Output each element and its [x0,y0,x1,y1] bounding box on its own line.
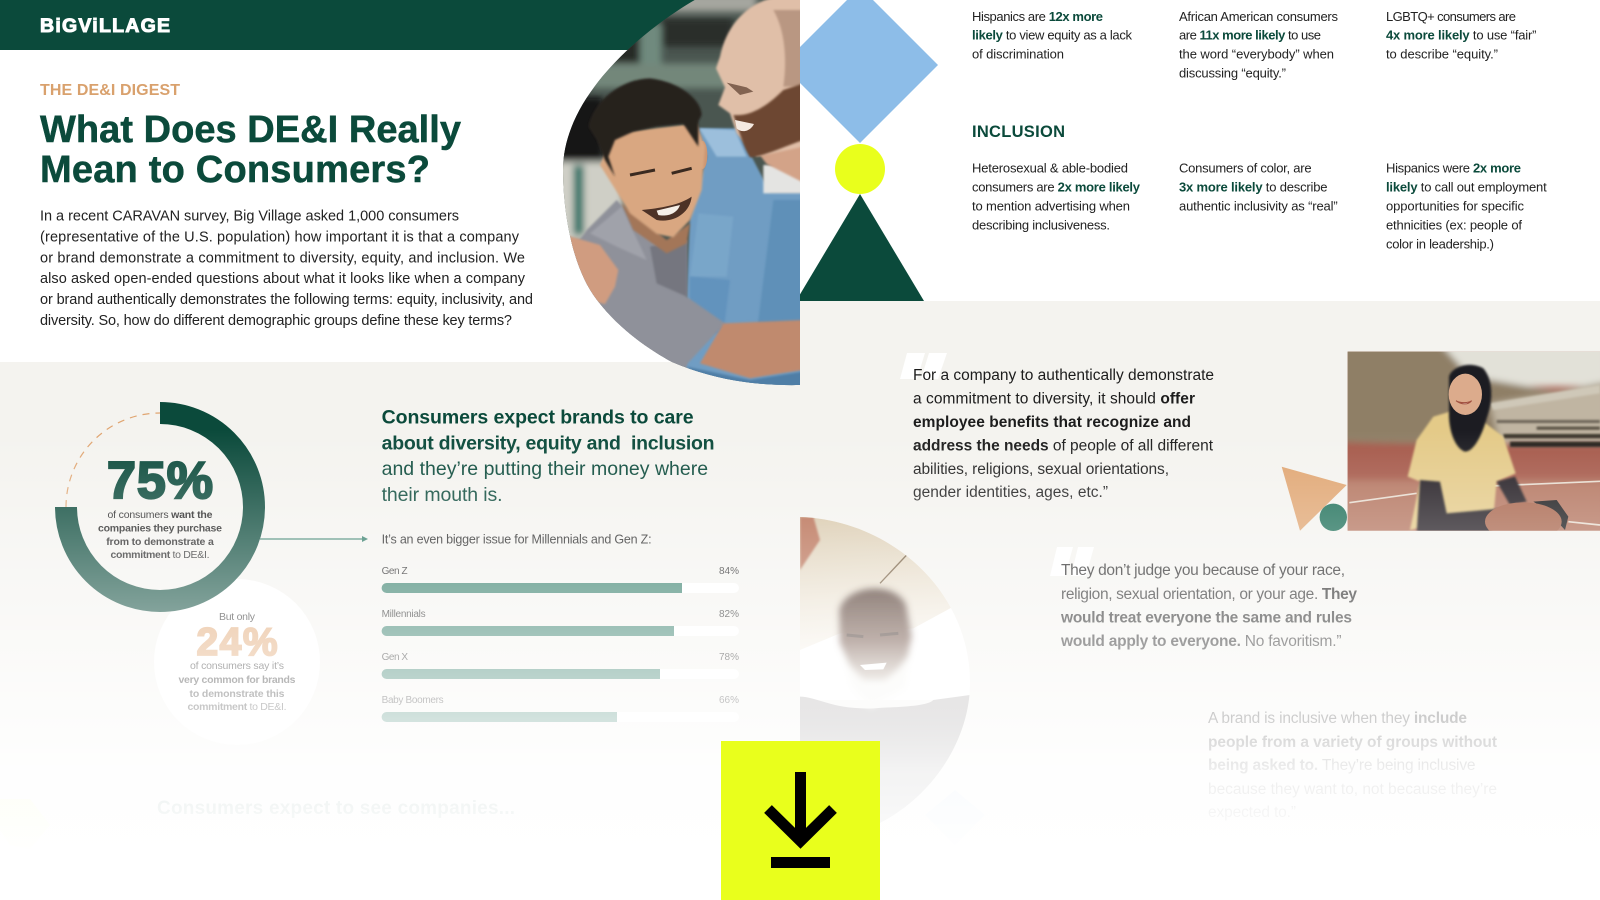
quote 1: a commitment to diversity, it should offer [913,390,1195,408]
inclusion findings [972,160,1547,252]
stat: but only 24%: But only [219,611,256,623]
stat: 75%: 75% [107,452,213,510]
shape: teal circle [1320,504,1347,531]
stat caption: 24%: of consumers say it’s [190,660,284,672]
title [40,109,461,191]
quote 3: A brand is inclusive when they include [1208,710,1467,727]
finding: African American equity: African American consumers [1179,9,1338,24]
bar: Millennials [382,609,739,636]
finding: heterosexual inclusion [972,160,1141,232]
finding: consumers of color inclusion: Consumers of color, are [1179,160,1312,176]
photo: woman with basketball [1348,352,1600,531]
finding: heterosexual inclusion: Heterosexual & able-bodied [972,160,1128,176]
faint blue shape [925,790,985,845]
neck [622,203,690,253]
icon: download arrow [768,772,833,868]
quote 3: because they want to, not because they’re [1208,781,1497,798]
dashed ring remainder [66,413,160,507]
left man's ear [702,141,708,169]
bar: Gen Z: Gen Z [382,566,408,577]
stat caption: 75%: from to demonstrate a [106,536,214,548]
intro paragraph: diversity. So, how do different demographic groups define these key terms? [40,313,512,329]
finding: African American equity [1179,9,1338,80]
heading: inclusion: INCLUSION [972,123,1065,141]
left man's hair [588,78,702,177]
intro paragraph: or brand authentically demonstrates the following terms: equity, inclusivity, and [40,292,533,308]
finding: LGBTQ equity: to describe “equity.” [1386,46,1498,62]
bar: Gen Z: 84% [719,566,739,577]
finding: LGBTQ equity [1386,9,1536,62]
shape: green triangle [796,194,924,301]
finding: African American equity: the word “everybody” when [1179,46,1334,62]
bar: Gen X: 78% [719,652,739,663]
finding: Hispanics inclusion: likely to call out employment [1386,180,1547,194]
finding: Hispanics equity: Hispanics are 12x more [972,9,1103,24]
logo: BiGViLLAGE [40,15,170,37]
hand [570,235,620,305]
finding: Hispanics inclusion: color in leadership.) [1386,236,1494,252]
quote 1 mark [900,353,947,379]
finding: consumers of color inclusion: authentic inclusivity as “real” [1179,198,1338,214]
bar: Gen Z [382,566,739,593]
shape: yellow circle [835,144,885,194]
bar: Gen X: Gen X [382,652,408,663]
intro paragraph: (representative of the U.S. population) how important it is that a company [40,230,520,246]
intro paragraph: In a recent CARAVAN survey, Big Village asked 1,000 consumers [40,208,459,224]
lower background fill [571,241,688,368]
quote 3: being asked to. They’re being inclusive [1208,757,1476,774]
donut chart: 75% [66,413,254,601]
headline: consumers expect: about diversity, equity and inclusion [382,432,715,454]
right man's shirt [687,128,803,390]
title: What Does DE&I Really [40,109,461,151]
bar: Gen X [382,652,739,679]
quote 3: people from a variety of groups without [1208,734,1497,751]
stat caption: 24%: very common for brands [178,674,296,686]
finding: Hispanics equity [972,9,1132,62]
stat caption: 24%: commitment to DE&I. [188,701,286,713]
heading: consumers expect to see companies: Consumers expect to see companies... [157,798,515,819]
left man's face [600,123,705,237]
stat caption: 75%: of consumers want the [108,509,213,521]
finding: Hispanics inclusion: ethnicities (ex: people of [1386,218,1522,232]
finding: consumers of color inclusion [1179,160,1338,214]
stat: but only 24%: 24% [196,621,278,664]
bar: Baby Boomers: Baby Boomers [382,695,444,706]
headline: consumers expect: their mouth is. [382,484,503,506]
stat caption: 75%: companies they purchase [98,522,222,534]
shape: blue diamond [800,0,938,143]
left man's shirt [570,200,725,372]
equity findings [972,9,1536,80]
quote 2: would treat everyone the same and rules [1060,610,1352,626]
forearm [700,320,803,378]
panel: lower left background [0,362,800,900]
quote 2 [1060,562,1357,650]
quote 2 mark [1050,547,1094,576]
intro paragraph: or brand demonstrate a commitment to diversity, equity, and inclusion. We [40,250,525,266]
photo: two men embracing [550,0,803,400]
arrow [260,536,368,542]
quote 1: For a company to authentically demonstrate [913,367,1214,384]
finding: LGBTQ equity: LGBTQ+ consumers are [1386,9,1516,24]
intro paragraph [40,208,533,329]
quote 1: gender identities, ages, etc.” [913,484,1108,501]
subheading: bar chart: It’s an even bigger issue for Millennials and Gen Z: [382,532,652,546]
hijab [1449,365,1491,452]
finding: Hispanics equity: likely to view equity as a lack [972,28,1132,42]
finding: African American equity: are 11x more likely to use [1179,28,1321,42]
arms [1417,480,1503,533]
white circle: 24% stat background [154,579,320,745]
bar chart: agreement by generation [382,566,739,722]
headline: consumers expect: Consumers expect brands to care [382,406,694,428]
finding: heterosexual inclusion: consumers are 2x more likely [972,180,1141,194]
eyebrow: THE DE&I DIGEST [40,82,180,99]
quote 2: religion, sexual orientation, or your age. They [1061,586,1357,603]
quote 2: would apply to everyone. No favoritism.” [1060,633,1342,650]
panel: lower right background [800,301,1600,900]
bar: Millennials: Millennials [382,609,426,620]
quote 1: abilities, religions, sexual orientations, [913,461,1169,478]
quote 3 [1208,710,1497,821]
bar: Millennials: 82% [719,609,739,620]
bar: Baby Boomers: 66% [719,695,739,706]
quote 3: expected to.” [1208,804,1296,821]
headline: consumers expect [382,406,715,506]
stat caption: 24% [178,660,296,713]
finding: consumers of color inclusion: 3x more likely to describe [1179,180,1328,194]
quote 1 [913,367,1214,501]
stat caption: 75%: commitment to DE&I. [110,549,210,561]
quote 1: employee benefits that recognize and [913,414,1191,431]
bar: Baby Boomers [382,695,739,722]
shape: peach triangle [1282,467,1347,531]
head [839,589,912,680]
stat caption: 75% [98,509,222,561]
finding: African American equity: discussing “equity.” [1179,66,1286,80]
finding: heterosexual inclusion: describing inclusiveness. [972,218,1110,232]
header bar [0,0,720,50]
quote 1: address the needs of people of all different [913,438,1214,454]
ball [1485,502,1562,531]
finding: Hispanics inclusion [1386,160,1547,252]
stat caption: 24%: to demonstrate this [190,688,285,700]
finding: Hispanics inclusion: Hispanics were 2x more [1386,160,1521,176]
beard [843,647,910,708]
shirt [1408,412,1516,530]
photo: smiling man [800,517,970,800]
quote 2: They don’t judge you because of your race, [1061,562,1345,579]
finding: heterosexual inclusion: to mention advertising when [972,198,1130,214]
finding: Hispanics inclusion: opportunities for specific [1386,198,1524,214]
face [1449,374,1482,415]
headline: consumers expect: and they’re putting their money where [382,458,708,480]
download button [721,741,880,900]
title: Mean to Consumers? [40,149,430,191]
right man's head [716,0,803,157]
finding: Hispanics equity: of discrimination [972,46,1064,62]
finding: LGBTQ equity: 4x more likely to use “fair” [1386,28,1536,42]
intro paragraph: also asked open-ended questions about what it looks like when a company [40,271,526,287]
faint yellow shape bottom left [0,799,50,849]
